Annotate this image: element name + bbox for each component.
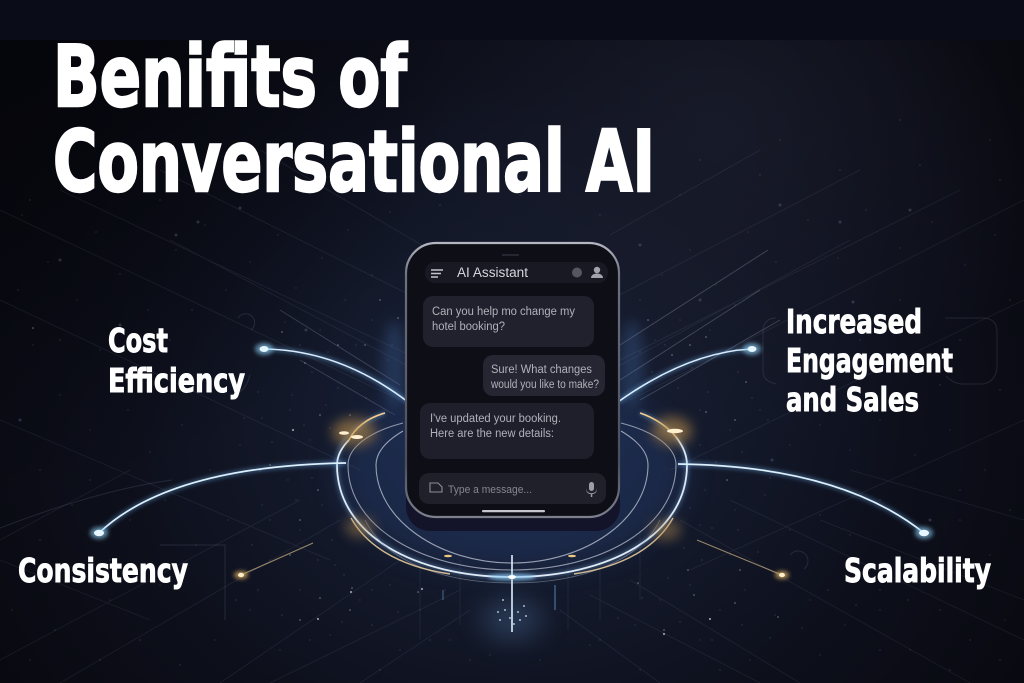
icon: attachment [430, 483, 442, 492]
chat bubble: assistant reply [483, 355, 605, 396]
connector: Scalability [678, 464, 933, 539]
phone header: AI Assistant [457, 265, 528, 280]
label: Cost Efficiency [108, 321, 245, 400]
chat bubble: booking update [420, 403, 594, 459]
label: Increased Engagement and Sales: Increased [786, 302, 922, 341]
title [53, 28, 655, 212]
icon: menu [431, 270, 443, 277]
chat bubble: user question: hotel booking? [432, 321, 505, 333]
chat bubble: booking update: I've updated your booking. [430, 413, 561, 425]
phone [406, 243, 620, 531]
connector: Cost Efficiency [255, 343, 408, 402]
faint decorative outlines [0, 314, 997, 620]
icon: microphone [586, 482, 597, 497]
title: Conversational AI [53, 113, 655, 212]
label: Cost Efficiency: Efficiency [108, 361, 245, 400]
label: Cost Efficiency: Cost [108, 321, 168, 360]
chat bubble: assistant reply: Sure! What changes [491, 364, 592, 376]
bright streaks beside the phone [280, 250, 780, 415]
connector: Consistency [90, 463, 346, 539]
label: Increased Engagement and Sales: and Sales [786, 380, 919, 419]
icon: user [591, 267, 603, 278]
label: Consistency: Consistency [18, 551, 188, 590]
title: Benifits of [53, 28, 408, 127]
chat bubble: assistant reply: would you like to make? [490, 379, 599, 391]
concentric rings [337, 413, 687, 583]
gold accents and glows [234, 413, 789, 579]
message input: Type a message... [448, 484, 532, 496]
glow around the rings [337, 321, 687, 638]
chat bubble: user question: Can you help mo change my [432, 306, 575, 318]
icon: globe [572, 268, 582, 278]
background grid lines [0, 150, 1024, 683]
message input [419, 473, 606, 504]
phone header [425, 262, 608, 283]
label: Increased Engagement and Sales: Engagement [786, 341, 953, 380]
chat bubble: booking update: Here are the new details: [430, 428, 554, 440]
chat bubble: user question [423, 296, 594, 347]
background star particles [12, 120, 1010, 670]
connector: Increased Engagement and Sales [618, 343, 761, 402]
central light beam below the phone [443, 555, 555, 632]
label: Increased Engagement and Sales [786, 302, 953, 419]
phone body [406, 243, 620, 531]
